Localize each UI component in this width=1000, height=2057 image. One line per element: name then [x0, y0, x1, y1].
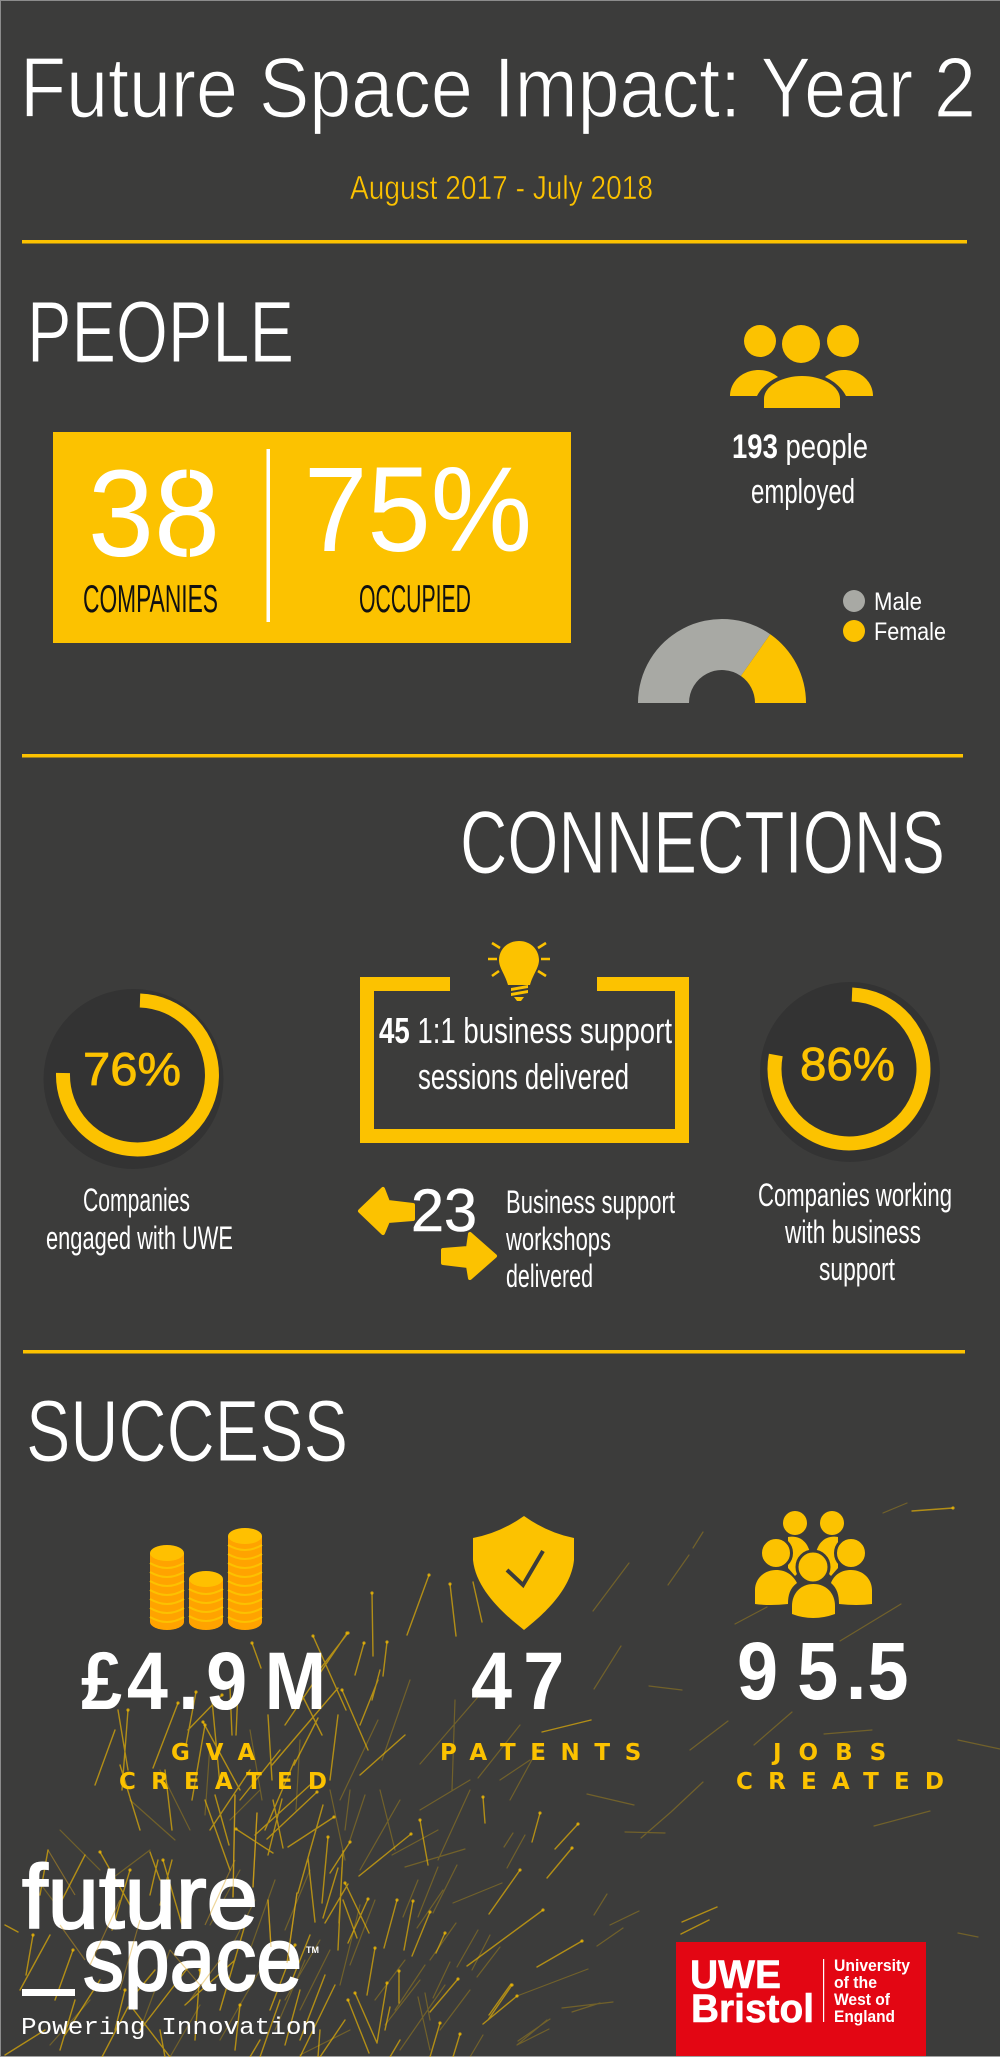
text: 1:1 sessions [379, 1010, 672, 1097]
stat: 75%: 75% [304, 441, 532, 577]
stat: jobs: CREATED [736, 1769, 959, 1795]
text: 1:1 sessions: sessions delivered [418, 1056, 629, 1097]
logo: future space: space [83, 1910, 302, 2010]
sparks background [5, 1503, 1000, 2057]
legend [843, 588, 946, 646]
label: occupied: OCCUPIED [359, 578, 471, 621]
stat: 23: 23 [411, 1177, 477, 1244]
heading: people: PEOPLE [27, 284, 294, 381]
heading: success: SUCCESS [26, 1383, 348, 1480]
text: 1:1 sessions: 45 1:1 business support [379, 1010, 672, 1051]
logo: UWE Bristol: University [834, 1956, 911, 1975]
stat: patents: 47 [471, 1634, 564, 1727]
panel: connections [44, 792, 952, 1294]
logo: future space [21, 1795, 319, 2042]
text: companies engaged [46, 1182, 233, 1256]
panel: success [26, 1383, 959, 1795]
date range: August 2017 - July 2018 [350, 169, 653, 206]
text: workshops: delivered [506, 1258, 593, 1294]
donut: 76 percent [44, 989, 224, 1169]
text: companies engaged: engaged with UWE [46, 1220, 233, 1256]
icon: right arrow [443, 1234, 495, 1278]
bracket frame [360, 977, 689, 1143]
icon: left arrow [360, 1189, 413, 1233]
stat: GVA: £4.9M [81, 1634, 326, 1727]
stat: jobs [736, 1624, 959, 1795]
logo: future space: future [22, 1848, 258, 1948]
text: people employed: 193 people [732, 428, 868, 466]
legend: Male [874, 588, 922, 616]
label: companies: COMPANIES [83, 578, 218, 621]
text: companies working: with business [784, 1214, 921, 1250]
chart: gender half donut [638, 619, 806, 703]
logo: UWE Bristol: West of [834, 1990, 890, 2009]
panel: people [27, 284, 946, 703]
icon: shield with check [473, 1516, 574, 1630]
text: workshops: Business support [506, 1184, 675, 1220]
logo: UWE Bristol: of the [834, 1973, 877, 1992]
logo: UWE Bristol: Bristol [691, 1987, 814, 2031]
logo: UWE Bristol: UWE [690, 1953, 781, 1997]
text: companies working: support [819, 1251, 895, 1287]
stat: 38: 38 [88, 446, 220, 583]
text: workshops [505, 1184, 675, 1294]
donut: 86 percent: 86% [800, 1038, 895, 1090]
legend: Female [874, 618, 946, 646]
donut: 86 percent [760, 982, 940, 1162]
text: employed: employed [751, 473, 855, 511]
logo: UWE Bristol: England [834, 2007, 895, 2026]
text: companies working [758, 1177, 952, 1287]
stat: jobs: 95.5 [737, 1624, 909, 1717]
donut: 76 percent: 76% [83, 1043, 181, 1095]
text: companies engaged: Companies [83, 1182, 190, 1218]
stat: patents: PATENTS [440, 1740, 656, 1766]
stat box: companies and occupancy [53, 432, 571, 643]
icon: light bulb [488, 941, 550, 1001]
logo: UWE Bristol [676, 1942, 926, 2056]
stat: patents [440, 1634, 656, 1766]
icon: group of people [755, 1511, 872, 1618]
stat: GVA [81, 1634, 342, 1795]
icon: three people [730, 325, 873, 408]
stat: GVA: CREATED [119, 1769, 342, 1795]
logo: future space: Powering Innovation [21, 2015, 317, 2042]
stat: jobs: JOBS [771, 1740, 903, 1766]
text: workshops: workshops [505, 1221, 611, 1257]
icon: coins [150, 1528, 262, 1630]
stat: GVA: GVA [171, 1740, 271, 1766]
logo: future space: TM [306, 1945, 319, 1955]
